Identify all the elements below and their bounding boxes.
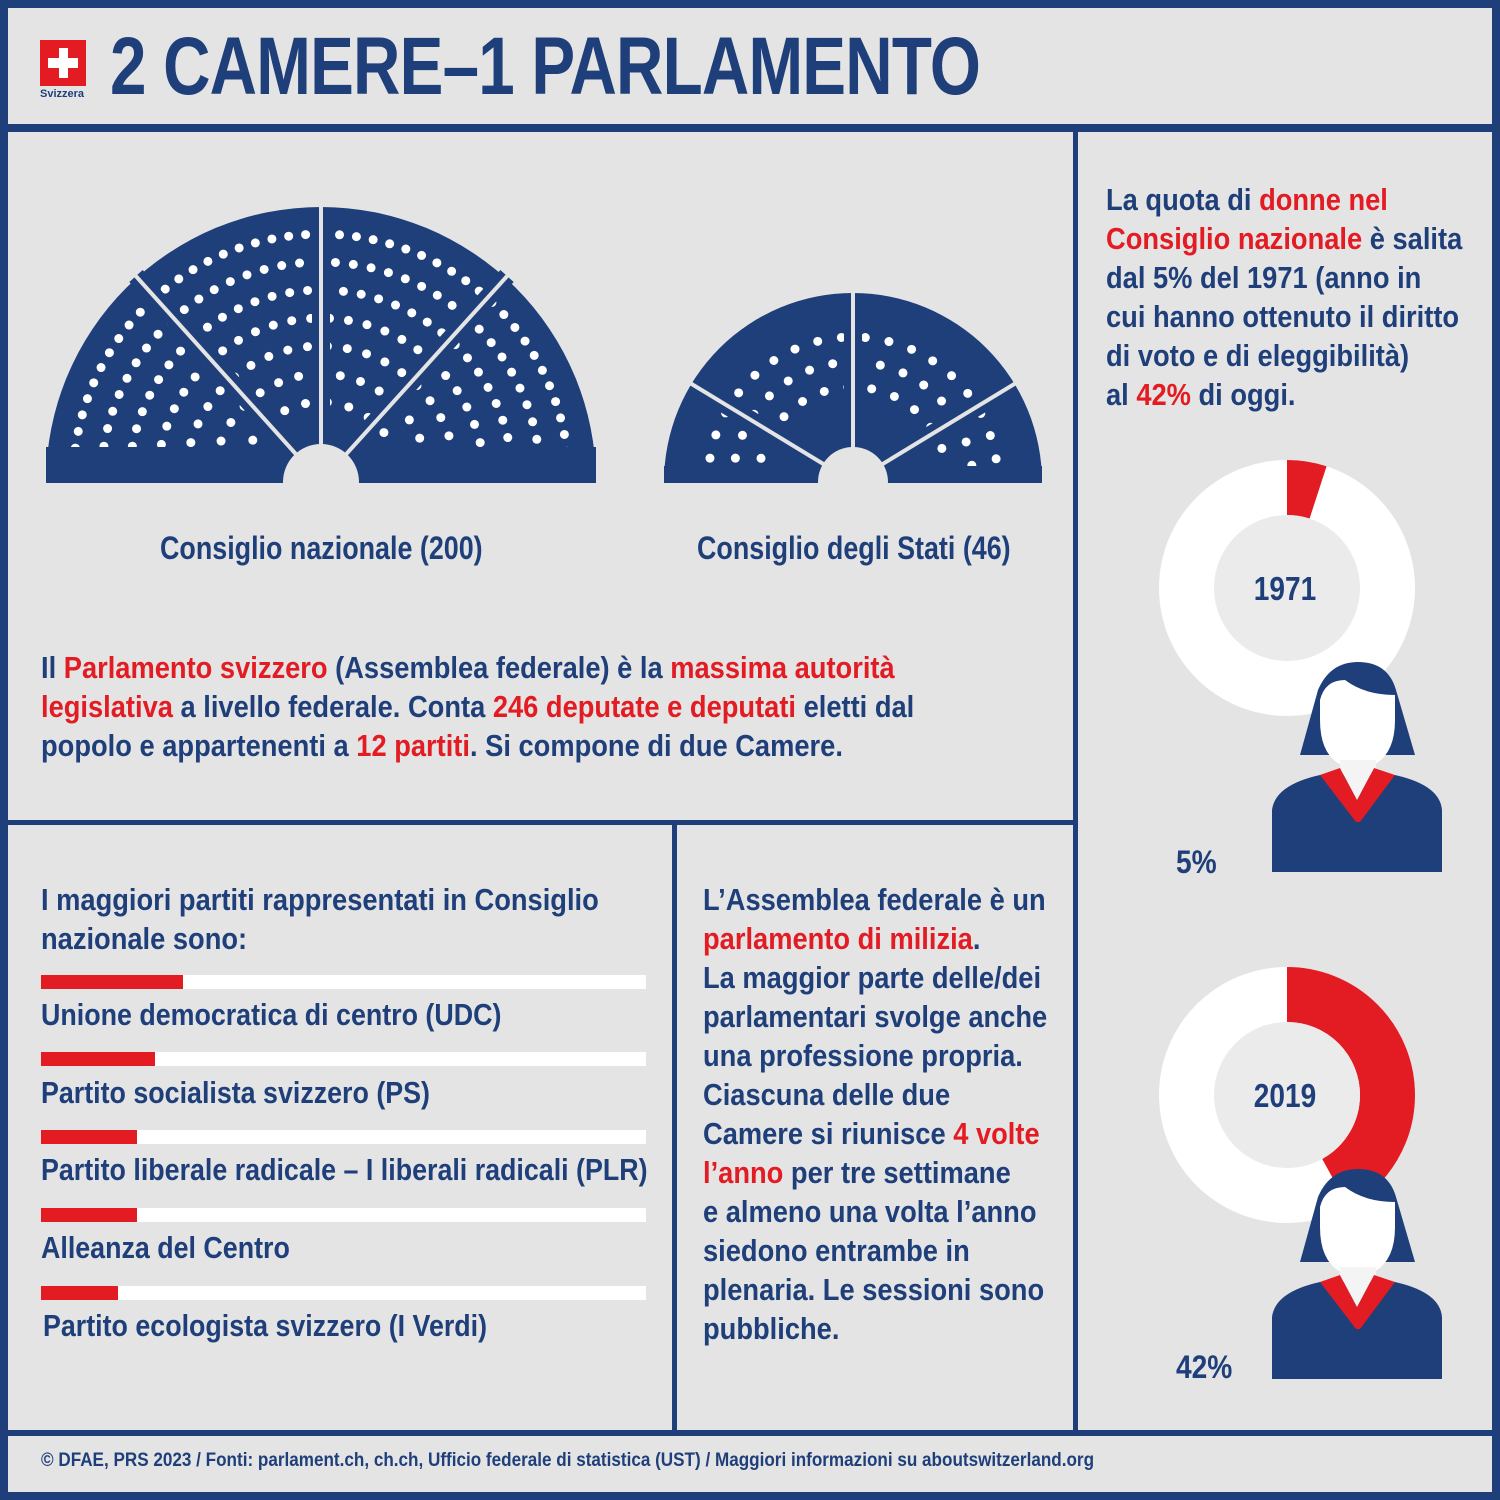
donut 1971 with woman: 1971 xyxy=(1254,571,1316,608)
bar chart: parties xyxy=(41,975,648,1343)
text: militia parliament: L’Assemblea federale è un xyxy=(703,882,1046,917)
intro text xyxy=(41,650,914,763)
bar chart: parties: Unione democratica di centro (UDC) xyxy=(41,997,501,1032)
text: women share: cui hanno ottenuto il diritto xyxy=(1106,299,1459,334)
donut 1971 with woman xyxy=(1159,460,1442,880)
label: Consiglio nazionale: Consiglio nazionale (200) xyxy=(160,530,483,566)
text: militia parliament: e almeno una volta l’anno xyxy=(703,1194,1036,1229)
bar chart: parties: Partito liberale radicale – I liberali radicali (PLR) xyxy=(41,1152,648,1187)
donut 2019 with woman: 2019 xyxy=(1254,1078,1316,1115)
footer: © DFAE, PRS 2023 / Fonti: parlament.ch, ch.ch, Ufficio federale di statistica (UST) / Maggiori informazioni su aboutswitzerland.org xyxy=(41,1450,1094,1471)
text: militia parliament: parlamento di milizia. xyxy=(703,921,980,956)
intro text: popolo e appartenenti a 12 partiti. Si compone di due Camere. xyxy=(41,728,843,763)
intro text: Il Parlamento svizzero (Assemblea federale) è la massima autorità xyxy=(41,650,895,685)
text: militia parliament: plenaria. Le sessioni sono xyxy=(703,1272,1044,1307)
text: militia parliament: l’anno per tre settimane xyxy=(703,1155,1011,1190)
text: women share: Consiglio nazionale è salita xyxy=(1106,221,1462,256)
chart: hemicycle Consiglio degli Stati xyxy=(664,293,1042,483)
text: women share: La quota di donne nel xyxy=(1106,182,1388,217)
text: militia parliament: una professione propria. xyxy=(703,1038,1023,1073)
parties heading xyxy=(41,882,599,956)
text: militia parliament: parlamentari svolge anche xyxy=(703,999,1047,1034)
text: women share: al 42% di oggi. xyxy=(1106,377,1295,412)
text: women share xyxy=(1106,182,1462,412)
text: militia parliament: La maggior parte delle/dei xyxy=(703,960,1041,995)
donut 2019 with woman xyxy=(1159,967,1442,1385)
text: women share: di voto e di eleggibilità) xyxy=(1106,338,1409,373)
logo: Swiss flag xyxy=(40,40,86,98)
donut 1971 with woman: 5% xyxy=(1176,845,1217,880)
chart: hemicycle Consiglio nazionale xyxy=(46,207,596,483)
parties heading: I maggiori partiti rappresentati in Consiglio xyxy=(41,882,599,917)
text: militia parliament: Camere si riunisce 4 volte xyxy=(703,1116,1040,1151)
bar chart: parties: Partito ecologista svizzero (I Verdi) xyxy=(43,1308,487,1343)
intro text: legislativa a livello federale. Conta 246 deputate e deputati eletti dal xyxy=(41,689,914,724)
bar chart: parties: Partito socialista svizzero (PS) xyxy=(41,1075,430,1110)
parties heading: nazionale sono: xyxy=(41,921,247,956)
text: women share: dal 5% del 1971 (anno in xyxy=(1106,260,1421,295)
donut 2019 with woman: 42% xyxy=(1176,1350,1232,1385)
text: militia parliament: siedono entrambe in xyxy=(703,1233,970,1268)
text: militia parliament: pubbliche. xyxy=(703,1311,839,1346)
text: militia parliament xyxy=(703,882,1047,1346)
text: militia parliament: Ciascuna delle due xyxy=(703,1077,950,1112)
title: 2 CAMERE–1 PARLAMENTO xyxy=(110,21,980,112)
label: Consiglio degli Stati: Consiglio degli Stati (46) xyxy=(697,530,1011,566)
bar chart: parties: Alleanza del Centro xyxy=(41,1230,290,1265)
